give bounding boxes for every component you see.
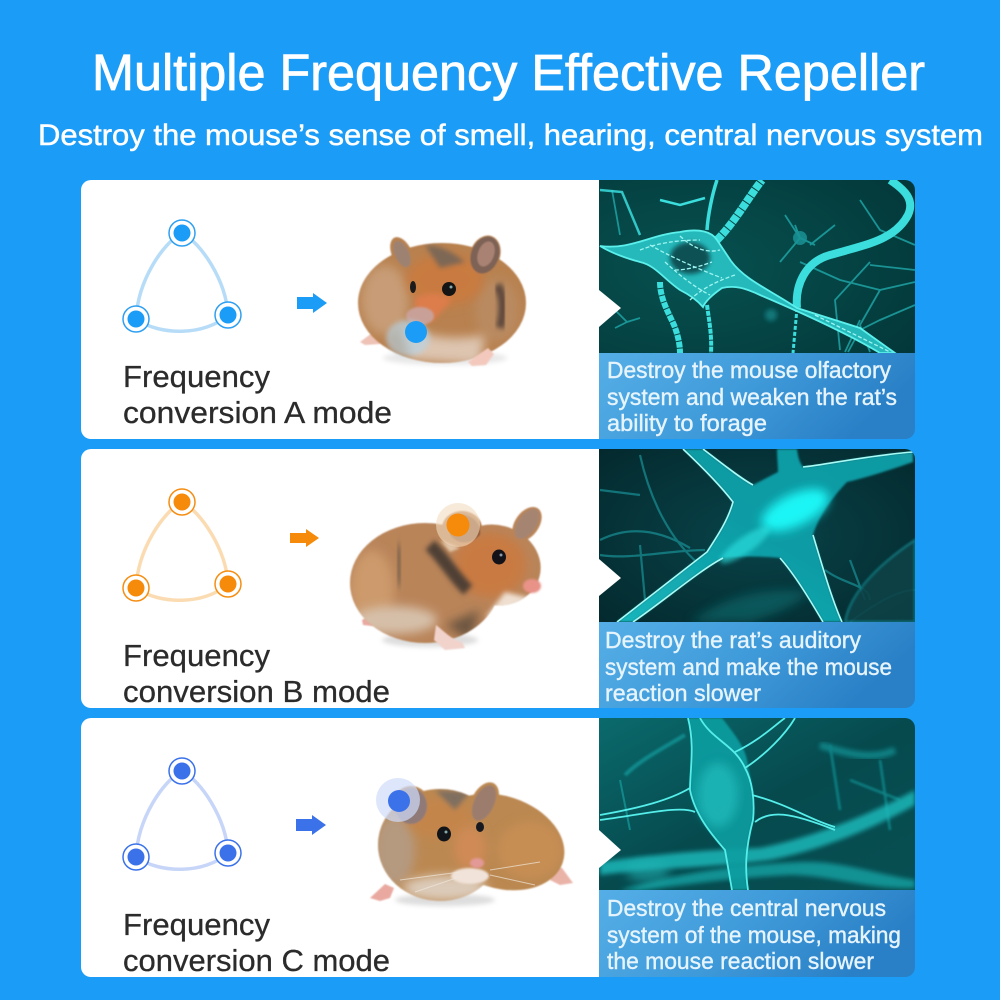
panel: frequency conversion B mode: [81, 449, 599, 709]
panel: frequency conversion A mode: [81, 180, 599, 439]
arrow B: [290, 529, 319, 547]
hamster A: [357, 234, 527, 367]
triangle diagram A: [123, 220, 241, 332]
arrow C: [296, 815, 326, 835]
panel: frequency conversion C mode: [81, 718, 599, 978]
neuron image 1: [599, 180, 915, 354]
label B: Frequency: [123, 638, 270, 673]
caption 2: system and make the mouse: [605, 654, 892, 680]
caption 2: Destroy the rat’s auditory: [605, 627, 861, 653]
triangle diagram B: [123, 489, 241, 601]
label A: conversion A mode: [123, 395, 392, 430]
label C: [123, 907, 390, 978]
label A: Frequency: [123, 359, 270, 394]
caption 3: the mouse reaction slower: [607, 948, 874, 974]
panel: auditory neuron image: [599, 449, 915, 708]
muzzle and whiskers: [400, 858, 540, 892]
hamster C: [370, 775, 573, 910]
label B: [123, 638, 390, 709]
target dot A: [405, 321, 427, 343]
label C: Frequency: [123, 907, 270, 942]
panel B background: [81, 449, 599, 708]
label C: conversion C mode: [123, 943, 390, 978]
arrow A: [297, 293, 327, 313]
label B: conversion B mode: [123, 674, 390, 709]
panel C background: [81, 718, 599, 977]
caption 1: [599, 353, 915, 439]
target dot B: [436, 503, 480, 547]
caption 1: Destroy the mouse olfactory: [607, 357, 891, 383]
notch pointer 3: [599, 830, 621, 868]
title: Multiple Frequency Effective Repeller: [92, 44, 925, 101]
muzzle: [406, 307, 434, 325]
hamster B: [340, 500, 550, 650]
label A: [123, 359, 392, 430]
subtitle: Destroy the mouse’s sense of smell, hearing, central nervous system: [38, 119, 983, 152]
caption 2: reaction slower: [605, 680, 761, 706]
notch pointer 1: [599, 290, 621, 327]
panel: central nervous neuron image: [599, 718, 915, 977]
panel: olfactory neuron image: [599, 180, 915, 439]
neuron image 3: [599, 718, 915, 891]
caption 1: ability to forage: [607, 410, 767, 436]
caption 2: [599, 622, 915, 708]
triangle diagram C: [123, 758, 241, 870]
caption 1: system and weaken the rat’s: [607, 384, 897, 410]
target dot C: [376, 778, 420, 822]
caption 3: [599, 890, 915, 977]
neuron image 2: [599, 449, 915, 623]
notch pointer 2: [599, 559, 621, 596]
caption 3: system of the mouse, making: [607, 922, 901, 948]
panel A background: [81, 180, 599, 439]
caption 3: Destroy the central nervous: [607, 895, 886, 921]
